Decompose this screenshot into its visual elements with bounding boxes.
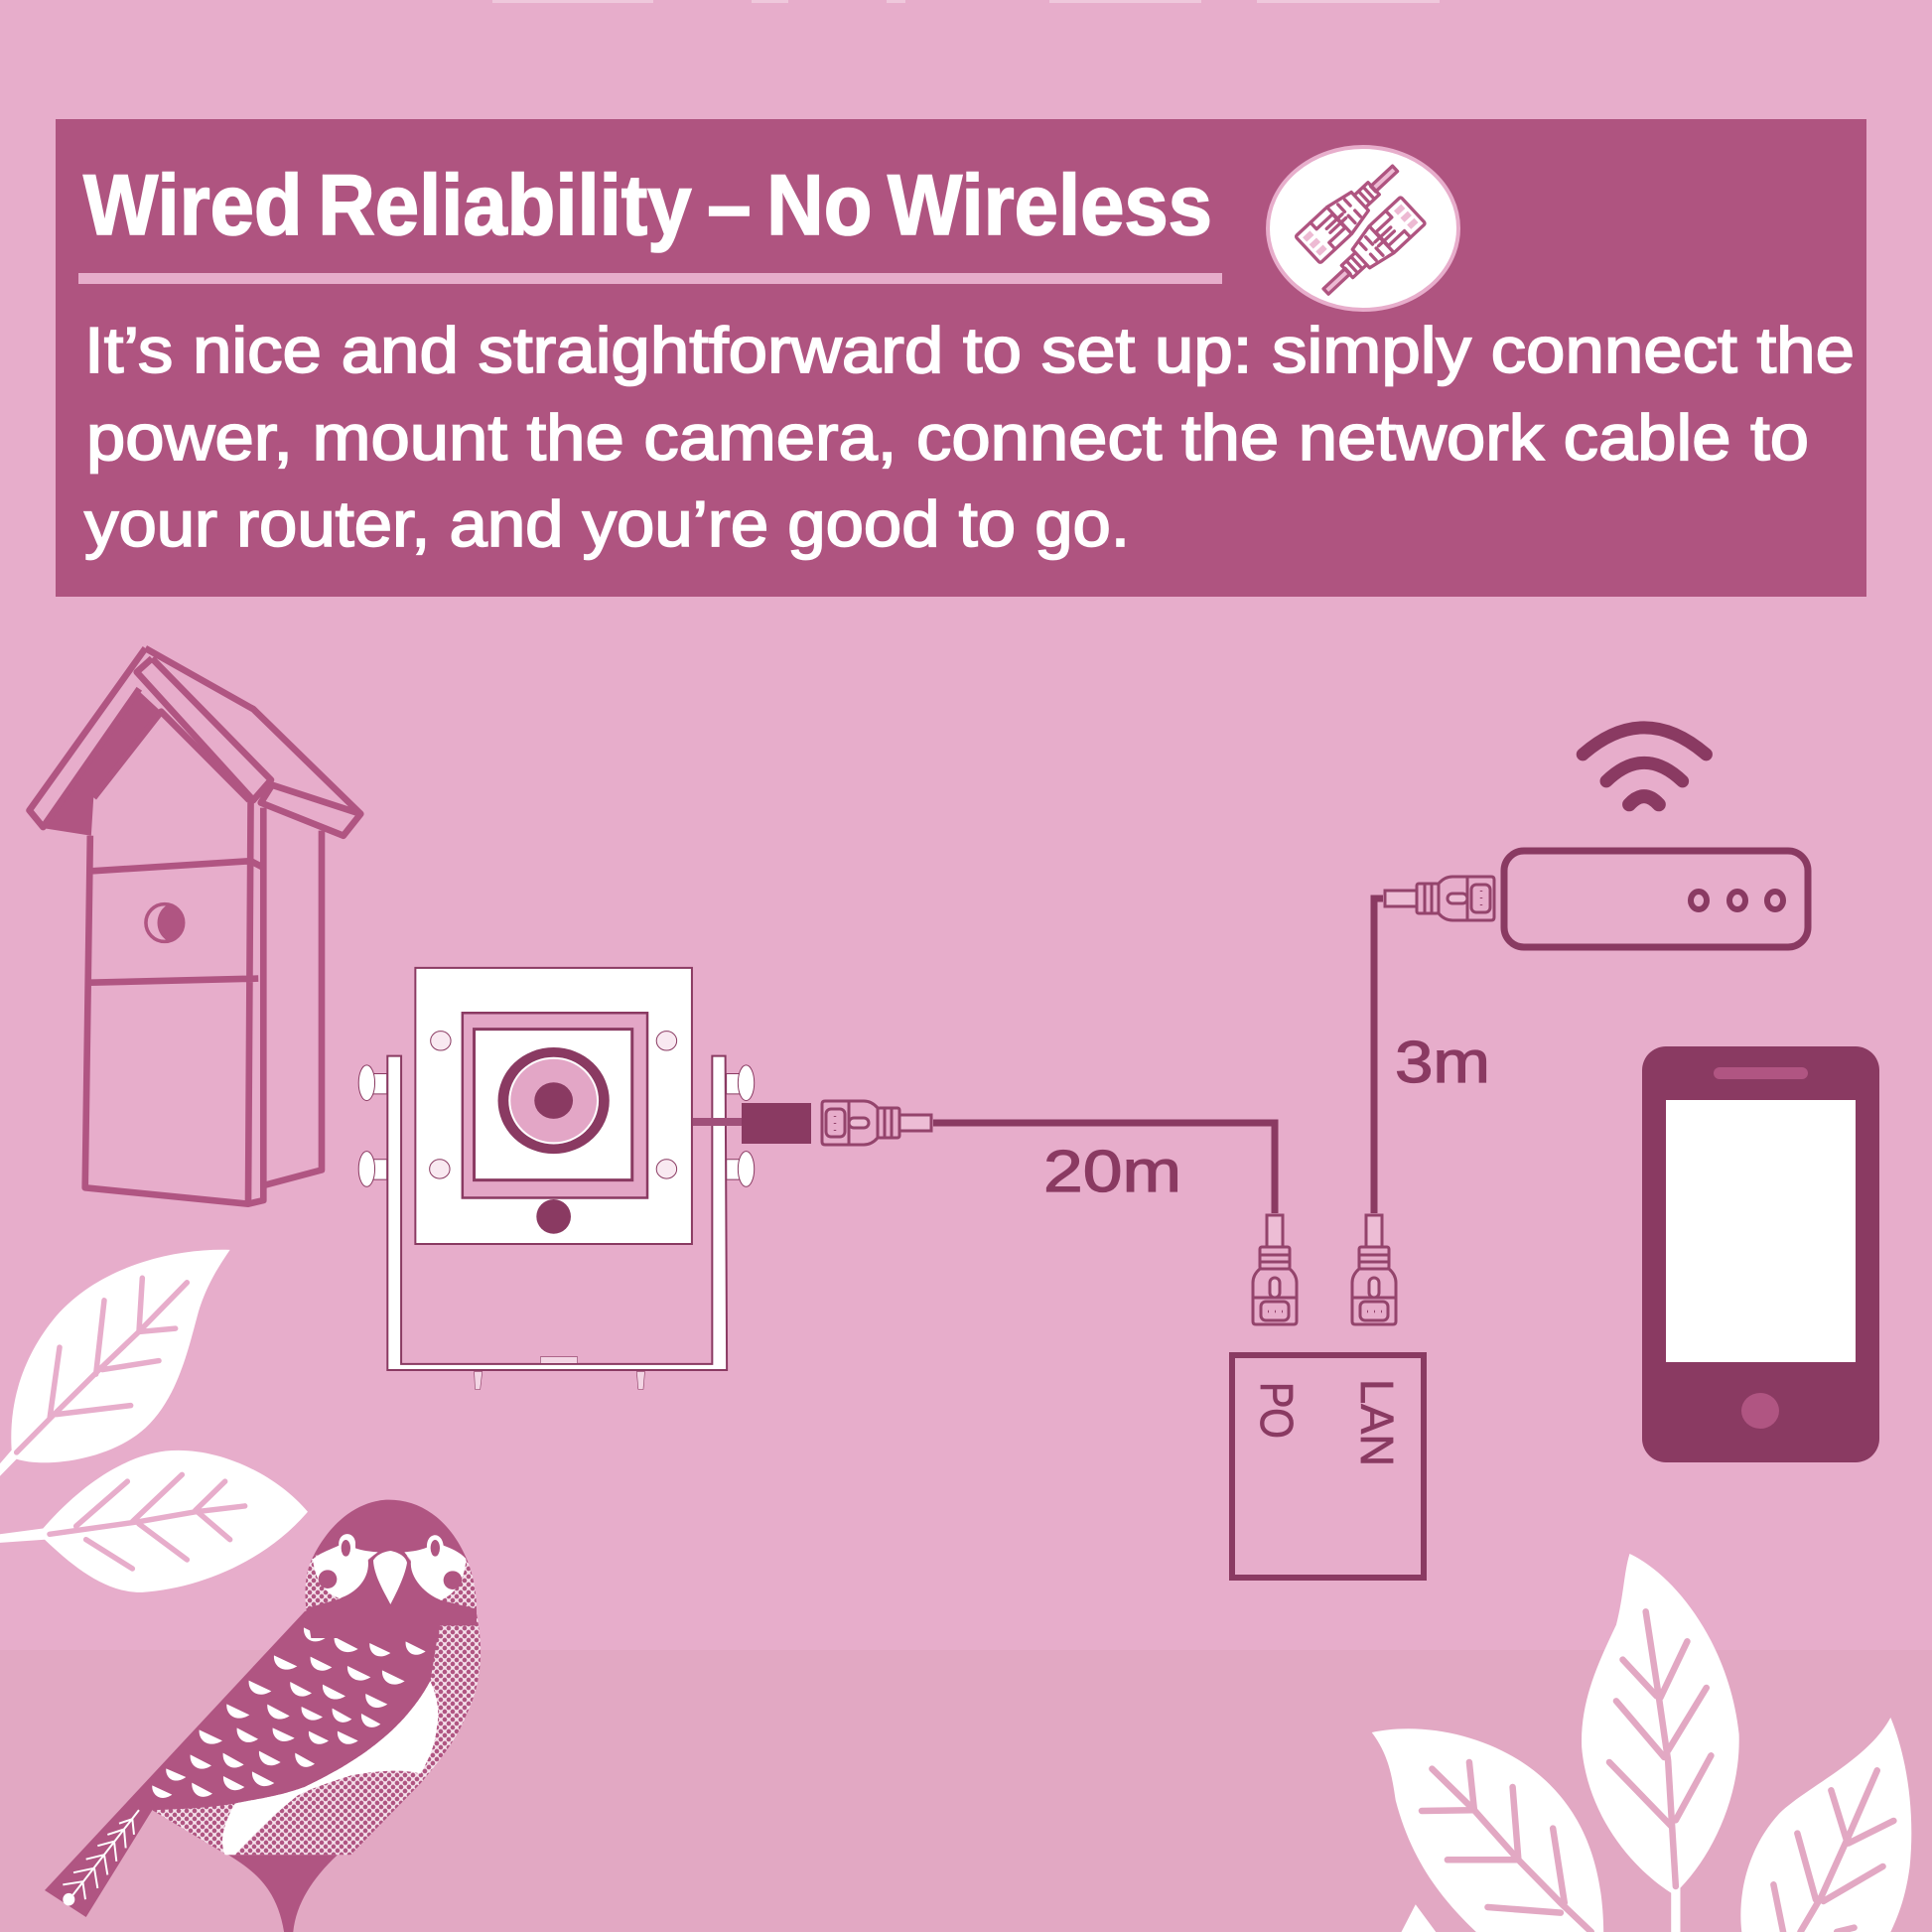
connectors bbox=[822, 877, 1494, 1324]
cable: camera to PoE, 20m bbox=[933, 1123, 1275, 1213]
heading underline bbox=[78, 273, 1222, 284]
right leaf bbox=[1740, 1718, 1911, 1932]
PoE injector box bbox=[1232, 1355, 1424, 1578]
lower leaf bbox=[0, 1450, 308, 1592]
illustration: camera on bracket bbox=[358, 968, 755, 1389]
tail feather detail bbox=[63, 1810, 139, 1906]
label: 20m: 20m bbox=[1043, 1139, 1181, 1204]
cropped title remnants at top edge bbox=[492, 0, 1440, 3]
wing feathers bbox=[152, 1627, 426, 1798]
entrance hole bbox=[146, 904, 184, 941]
head cap bbox=[314, 1500, 468, 1561]
router bbox=[1504, 851, 1808, 947]
PoE injector box: PO bbox=[1251, 1382, 1303, 1439]
smartphone bbox=[1642, 1046, 1879, 1462]
bracket bolts bbox=[358, 1065, 755, 1186]
small leaf tip bbox=[1402, 1904, 1436, 1932]
bracket bbox=[387, 1056, 727, 1370]
beak bbox=[373, 1551, 407, 1604]
cable: PoE to router, 3m bbox=[1374, 898, 1383, 1213]
face mask left bbox=[313, 1534, 378, 1598]
body text: It’s nice and straightforward to set up: simply connect the bbox=[84, 314, 1855, 386]
illustration: bird bbox=[45, 1500, 481, 1932]
body text: power, mount the camera, connect the network cable to bbox=[86, 401, 1809, 474]
sensor dot bbox=[536, 1199, 571, 1234]
upper leaf bbox=[0, 1250, 230, 1476]
body text: your router, and you’re good to go. bbox=[84, 487, 1130, 560]
belly and leg bbox=[228, 1855, 338, 1932]
decorative leaves: left bbox=[0, 1250, 308, 1592]
illustration: bird box bbox=[30, 648, 360, 1204]
camera cable socket bbox=[693, 1103, 811, 1144]
PoE injector box: LAN bbox=[1351, 1379, 1403, 1466]
label: 3m: 3m bbox=[1395, 1030, 1490, 1095]
centre leaf bbox=[1582, 1554, 1739, 1932]
icon: network cables bbox=[1268, 147, 1458, 310]
phone home button bbox=[1741, 1393, 1779, 1429]
icon: wifi bbox=[1583, 728, 1706, 804]
lens bbox=[498, 1047, 610, 1154]
bracket fixings bbox=[475, 1357, 644, 1389]
panel: wired reliability bbox=[56, 119, 1866, 597]
face mask right bbox=[404, 1535, 466, 1600]
body text bbox=[84, 314, 1855, 560]
bird head bbox=[305, 1500, 477, 1638]
heading: Wired Reliability – No Wireless bbox=[83, 158, 1212, 253]
camera plate bbox=[415, 968, 692, 1244]
mounting holes bbox=[430, 1032, 677, 1178]
wing and tail bbox=[45, 1588, 477, 1917]
halftone plumage bbox=[152, 1611, 481, 1855]
lens housing bbox=[463, 1013, 647, 1198]
decorative leaves: bottom right bbox=[1372, 1554, 1911, 1932]
white breast patch bbox=[222, 1681, 438, 1855]
lower face bbox=[306, 1552, 477, 1638]
phone screen bbox=[1666, 1100, 1856, 1362]
left leaf bbox=[1372, 1728, 1603, 1932]
phone speaker bbox=[1714, 1067, 1808, 1079]
halftone cheeks bbox=[305, 1556, 477, 1609]
